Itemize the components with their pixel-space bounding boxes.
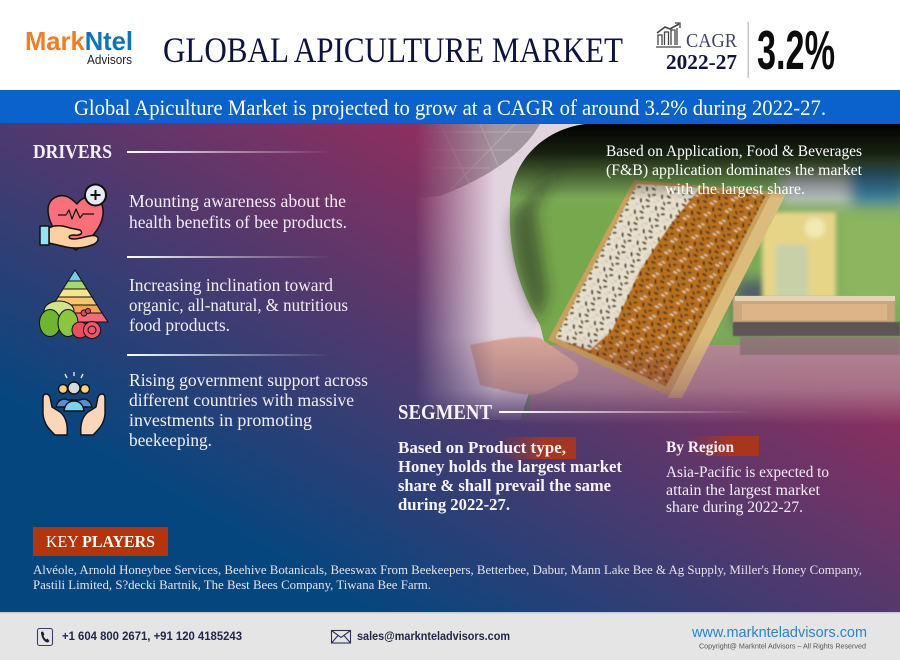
driver text 3: Rising government support across (129, 370, 368, 390)
footer: Copyright@ Markntel Advisors – All Rights Reserved (699, 642, 866, 650)
driver text 3: investments in promoting (129, 410, 312, 430)
driver text 2: food products. (129, 315, 230, 335)
segment: product type: Honey holds the largest market (398, 457, 622, 476)
segment: region: share during 2022-27. (666, 499, 803, 516)
icon: food pyramid (40, 270, 108, 338)
CAGR block (656, 19, 835, 81)
CAGR block: 3.2% (757, 19, 835, 81)
icon: email (332, 630, 350, 643)
header background (0, 0, 900, 90)
footer (0, 612, 900, 660)
person (419, 124, 585, 420)
CAGR block: 2022-27 (666, 50, 737, 74)
key players badge: KEY PLAYERS (46, 532, 155, 551)
background gradient panel (0, 123, 900, 613)
summary banner: Global Apiculture Market is projected to grow at a CAGR of around 3.2% during 2022-27. (74, 95, 826, 120)
segment: product type: Based on Product type, (398, 438, 566, 457)
application callout (606, 143, 863, 198)
logo: Advisors (87, 53, 132, 67)
icon: people in hands (43, 372, 105, 435)
driver text 2: organic, all-natural, & nutritious (129, 295, 348, 315)
logo: MarkNtel (25, 26, 133, 56)
footer: +1 604 800 2671, +91 120 4185243 (62, 631, 242, 643)
application callout: Based on Application, Food & Beverages (606, 143, 862, 160)
driver text 2: Increasing inclination toward (129, 275, 333, 295)
driver text 3: beekeeping. (129, 430, 212, 450)
CAGR block: CAGR (686, 30, 738, 52)
icon: heart in hand (40, 184, 106, 250)
key players list: Alvéole, Arnold Honeybee Services, Beehive Botanicals, Beeswax From Beekeepers, Betterbee, Dabur, Mann Lake Bee & Ag Supply, Miller's Honey Company, (33, 562, 862, 577)
drivers heading: DRIVERS (33, 141, 112, 163)
driver text 1 (129, 191, 347, 232)
photo: beekeeper holding honeycomb frame (400, 124, 900, 435)
segment: region (666, 436, 829, 516)
driver text 3 (129, 370, 368, 450)
segment: region: attain the largest market (666, 482, 821, 499)
icon: growth chart (656, 23, 681, 47)
key players badge (33, 527, 168, 556)
segment: product type (398, 437, 622, 514)
application callout: with the largest share. (665, 181, 805, 198)
title: GLOBAL APICULTURE MARKET (163, 30, 623, 70)
segment heading: SEGMENT (398, 400, 492, 424)
summary banner (0, 90, 900, 123)
segment: product type: during 2022-27. (398, 495, 510, 514)
icon: phone (38, 628, 52, 646)
application callout: (F&B) application dominates the market (606, 162, 863, 179)
key players list (33, 562, 862, 592)
driver text 1: Mounting awareness about the (129, 191, 346, 211)
driver text 3: different countries with massive (129, 390, 354, 410)
footer: sales@marknteladvisors.com (357, 631, 510, 643)
segment: region: Asia-Pacific is expected to (666, 464, 829, 481)
frame (548, 180, 778, 398)
segment: product type: share & shall prevail the same (398, 476, 611, 495)
segment: region: By Region (666, 439, 734, 456)
driver text 2 (129, 275, 348, 335)
footer: www.marknteladvisors.com (691, 624, 867, 641)
driver text 1: health benefits of bee products. (129, 212, 347, 232)
key players list: Pastili Limited, S?decki Bartnik, The Best Bees Company, Tiwana Bee Farm. (33, 577, 431, 592)
